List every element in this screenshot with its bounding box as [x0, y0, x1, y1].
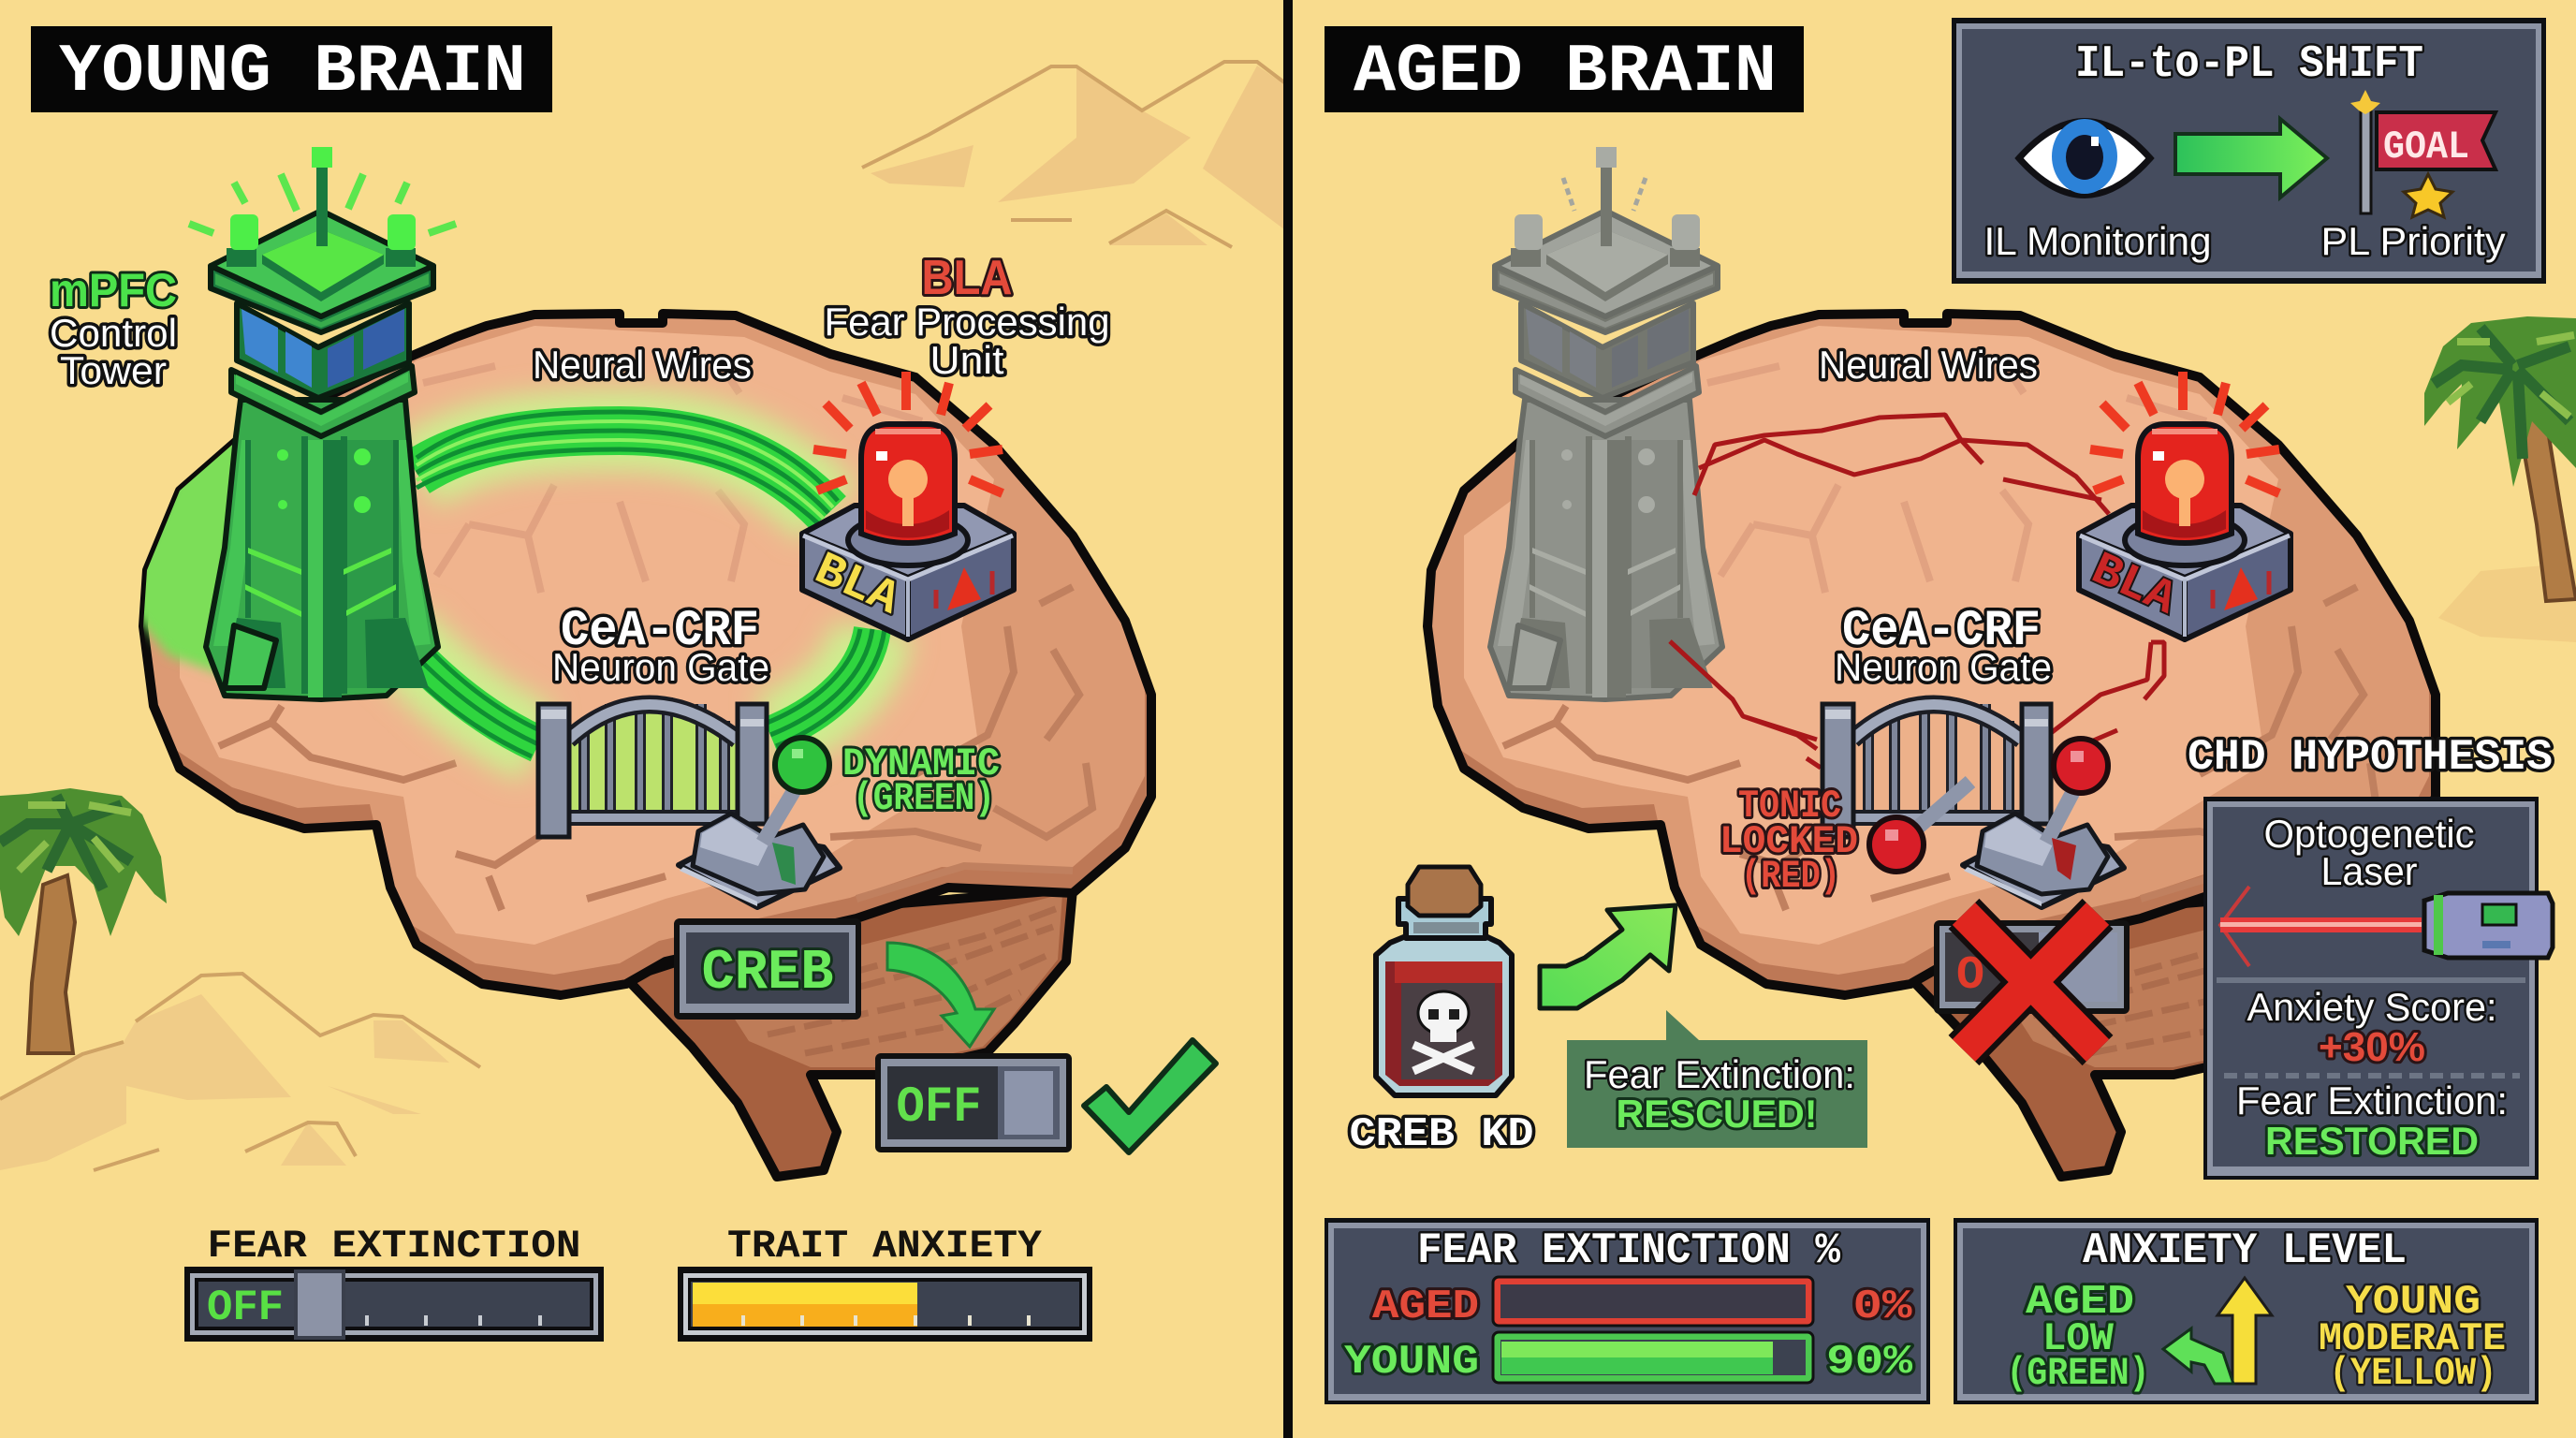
mPFC label: Control [50, 311, 177, 355]
BLA label [824, 251, 1110, 382]
broken switch with red X [1934, 914, 2130, 1050]
trait anxiety meter: TRAIT ANXIETY [727, 1224, 1043, 1269]
fear extinction rescued callout: RESCUED! [1616, 1092, 1818, 1136]
fear extinction % chart: AGED [1372, 1284, 1479, 1330]
lever label: (GREEN) [853, 776, 995, 821]
trait anxiety meter [678, 1224, 1092, 1342]
palm tree [0, 788, 167, 1053]
laser device [2424, 893, 2553, 958]
tonic locked label [1720, 784, 1858, 899]
title: aged brain: AGED BRAIN [1354, 34, 1777, 110]
CeA-CRF gate aged [1822, 697, 2051, 837]
anxiety level panel: (GREEN) [2007, 1351, 2149, 1396]
panel: young brain [0, 26, 1284, 1342]
arrow: IL to PL [2175, 119, 2327, 198]
anxiety level panel: LOW [2042, 1316, 2115, 1361]
neural wires: broken red [1670, 415, 2164, 768]
anxiety level panel: (YELLOW) [2329, 1351, 2497, 1396]
anxiety level panel [1954, 1218, 2539, 1404]
BLA alarm aged: BLA [2083, 544, 2184, 627]
fear extinction rescued callout [1567, 1010, 1867, 1148]
neural wires: green [387, 412, 885, 756]
IL-to-PL shift panel [1952, 18, 2546, 284]
panel: aged brain [1325, 18, 2576, 1404]
fear extinction % chart: 0% [1853, 1284, 1912, 1330]
desert dunes top right [862, 62, 1284, 247]
fear extinction meter: FEAR EXTINCTION [208, 1224, 580, 1269]
BLA label: Fear Processing [824, 300, 1110, 344]
fear extinction % chart: YOUNG [1344, 1339, 1479, 1386]
OFF switch [875, 1053, 1072, 1152]
BLA alarm aged [2079, 372, 2291, 639]
BLA label: BLA [921, 251, 1013, 305]
optogenetic laser panel: +30% [2319, 1024, 2425, 1070]
control tower: mPFC [206, 147, 438, 699]
laser beam [2220, 887, 2422, 966]
lever label [842, 741, 1000, 821]
fear extinction % chart [1325, 1218, 1930, 1404]
control tower: gray [1490, 147, 1722, 699]
brain illustration [137, 293, 1151, 1177]
green glow around tower [143, 444, 232, 681]
curved arrow down [887, 943, 994, 1047]
neural wires label: Neural Wires [533, 343, 752, 387]
tower signal rays [189, 174, 456, 233]
title: young brain: YOUNG BRAIN [59, 34, 526, 110]
lever: locked red [1869, 739, 2124, 907]
arrow: young up yellow [2217, 1278, 2272, 1384]
IL-to-PL shift panel: PL Priority [2321, 219, 2505, 263]
icon: goal flag [2350, 90, 2496, 217]
IL-to-PL shift panel: IL-to-PL SHIFT [2075, 39, 2423, 90]
mPFC label: Tower [60, 348, 167, 392]
icon: goal flag: GOAL [2383, 125, 2469, 169]
CeA-CRF label: CeA-CRF [1842, 603, 2041, 660]
CeA-CRF label: Neuron Gate [1835, 645, 2052, 689]
CHD hypothesis heading: CHD HYPOTHESIS [2188, 733, 2553, 782]
lever label: DYNAMIC [842, 741, 1000, 786]
icon: eye [2019, 119, 2150, 195]
CeA-CRF label [552, 603, 769, 689]
brain illustration aged [1421, 293, 2436, 1177]
BLA alarm [802, 372, 1014, 639]
anxiety level panel: AGED [2026, 1279, 2134, 1326]
BLA alarm: BLA [806, 544, 907, 627]
palm tree right [2424, 316, 2576, 642]
CREB KD poison bottle [1350, 867, 1533, 1158]
fear extinction meter [184, 1224, 604, 1342]
optogenetic laser panel [2203, 797, 2553, 1180]
tonic locked label: TONIC [1738, 784, 1841, 829]
CREB switch box [674, 918, 861, 1020]
anxiety level panel: YOUNG [2346, 1279, 2481, 1326]
fear extinction rescued callout: Fear Extinction: [1584, 1052, 1855, 1096]
mPFC label [50, 264, 177, 392]
center divider [1283, 0, 1293, 1438]
CeA-CRF label: CeA-CRF [561, 603, 759, 660]
optogenetic laser panel: Laser [2321, 849, 2418, 893]
anxiety level panel: MODERATE [2319, 1316, 2506, 1361]
OFF switch: OFF [897, 1079, 981, 1137]
optogenetic laser panel: Optogenetic [2263, 812, 2475, 856]
green rescue arrow [1540, 905, 1676, 1008]
faded antenna rays [1563, 178, 1646, 211]
IL-to-PL shift panel: IL Monitoring [1984, 219, 2211, 263]
CeA-CRF gate [538, 697, 767, 837]
mPFC label: mPFC [50, 264, 177, 316]
broken switch with red X: O [1956, 949, 1984, 1003]
CeA-CRF label [1835, 603, 2052, 689]
tonic locked label: LOCKED [1720, 819, 1858, 864]
lever: dynamic green [679, 738, 840, 907]
check mark [1084, 1040, 1216, 1152]
tonic locked label: (RED) [1741, 854, 1840, 899]
BLA label: Unit [930, 338, 1004, 382]
neural wires label: Neural Wires [1819, 343, 2038, 387]
CeA-CRF label: Neuron Gate [552, 645, 769, 689]
arrow: aged down green [2163, 1328, 2233, 1384]
optogenetic laser panel: RESTORED [2265, 1119, 2479, 1163]
CREB switch box: CREB [702, 942, 833, 1005]
CREB KD poison bottle: CREB KD [1350, 1111, 1533, 1158]
optogenetic laser panel: Fear Extinction: [2236, 1078, 2508, 1123]
fear extinction meter: OFF [207, 1284, 284, 1332]
desert dunes bottom left [0, 974, 480, 1170]
anxiety level panel: ANXIETY LEVEL [2083, 1226, 2407, 1275]
optogenetic laser panel: Anxiety Score: [2247, 985, 2497, 1029]
fear extinction % chart: 90% [1826, 1339, 1913, 1386]
fear extinction % chart: FEAR EXTINCTION % [1417, 1226, 1840, 1275]
